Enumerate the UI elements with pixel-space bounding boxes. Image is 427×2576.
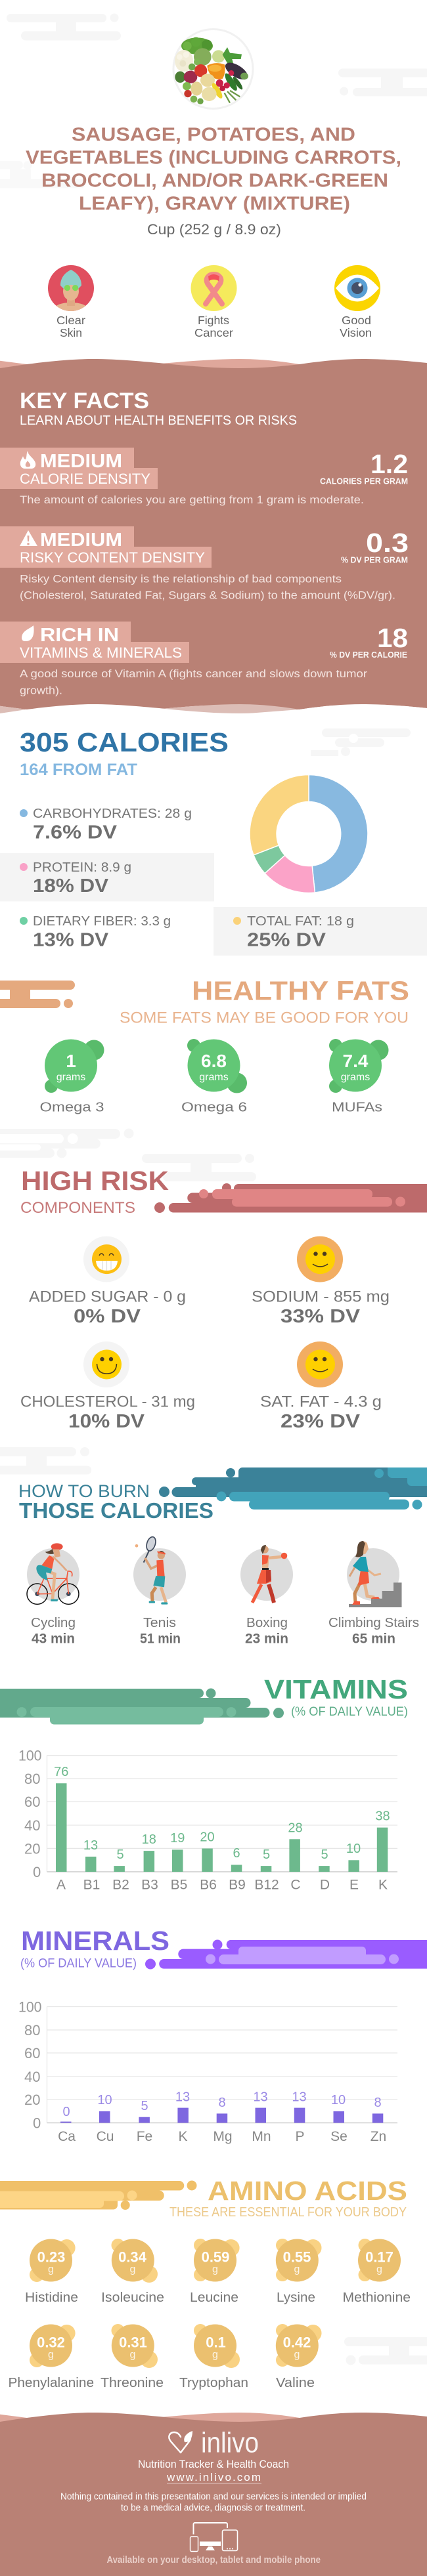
title: BROCCOLI, AND/OR DARK-GREEN: [41, 171, 388, 192]
macro: protein: [0, 853, 214, 902]
bar chart: minerals: 10: [331, 2093, 346, 2107]
amino: histidine: Histidine: [25, 2291, 78, 2305]
donut chart: calories by macro: [250, 774, 368, 893]
bar chart: vitamins: B12: [254, 1878, 279, 1893]
bar chart: minerals: 10: [97, 2093, 112, 2107]
heading: calories: 305 CALORIES: [20, 727, 229, 757]
fact: calorie density: CALORIES PER GRAM: [320, 476, 408, 486]
amino: threonine: g: [130, 2350, 135, 2361]
bar chart: minerals: 5: [141, 2099, 148, 2113]
bar chart: minerals: 8: [374, 2096, 382, 2110]
icon: flame: [20, 451, 35, 469]
macro: total fat: [214, 907, 427, 956]
background cloud: above burn section: [0, 1447, 91, 1474]
risk: saturated fat: SAT. FAT - 4.3 g: [260, 1393, 382, 1411]
title: SAUSAGE, POTATOES, AND: [72, 125, 355, 146]
heading: vitamins: VITAMINS: [264, 1674, 408, 1704]
bar chart: minerals: Mn: [252, 2129, 271, 2144]
bar chart: vitamins: 10: [346, 1842, 361, 1856]
macro: carbohydrates: [20, 807, 192, 843]
background cloud: behind title: [0, 161, 85, 188]
decoration: high risk banner: [154, 1183, 427, 1213]
bar chart: minerals: 8: [218, 2096, 226, 2110]
amino: valine: Valine: [276, 2376, 315, 2390]
bar chart: vitamins: 80: [24, 1771, 40, 1787]
fact: risky content density: 0.3: [366, 528, 409, 558]
tagline: Nutrition Tracker & Health Coach: [138, 2458, 289, 2470]
exercise: climbing stairs: Climbing Stairs: [328, 1616, 419, 1630]
amino: lysine: Lysine: [277, 2291, 315, 2305]
exercise: climbing stairs: [328, 1541, 419, 1646]
amino: histidine: [25, 2239, 78, 2305]
amino: valine: g: [294, 2350, 300, 2361]
risk: sodium: SODIUM - 855 mg: [252, 1288, 390, 1306]
bar chart: minerals: Ca: [58, 2129, 76, 2144]
macro: protein: 18% DV: [33, 876, 109, 897]
macro: total fat: 25% DV: [247, 929, 326, 950]
bar chart: vitamins: B6: [200, 1878, 217, 1893]
risk: saturated fat: [260, 1341, 382, 1432]
bar chart: minerals: Fe: [137, 2129, 152, 2144]
bar chart: vitamins: B1: [83, 1878, 100, 1893]
title: LEAFY), GRAVY (MIXTURE): [79, 193, 350, 214]
bar chart: minerals: 40: [24, 2069, 40, 2085]
wave: bottom of key facts: [0, 702, 427, 710]
fact: rich in vitamins and minerals: A good source of Vitamin A (fights cancer and slows down tumor: [20, 667, 367, 680]
amino: methionine: Methionine: [343, 2291, 411, 2305]
fact: rich in vitamins and minerals: VITAMINS & MINERALS: [20, 644, 182, 661]
amino: tryptophan: Tryptophan: [179, 2376, 248, 2390]
fact: risky content density: (Cholesterol, Saturated Fat, Sugars & Sodium) to the amount (%DV/gr).: [20, 589, 395, 601]
macro: carbohydrates: CARBOHYDRATES: 28 g: [33, 807, 192, 821]
macro: carbohydrates: 7.6% DV: [33, 822, 118, 843]
bar chart: vitamins: 38: [375, 1809, 390, 1823]
bar chart: minerals: P: [295, 2129, 305, 2144]
heading: those calories: THOSE CALORIES: [19, 1498, 214, 1523]
fact: rich in vitamins and minerals: [0, 622, 408, 697]
amino: leucine: 0.59: [202, 2249, 229, 2266]
macro: dietary fiber: DIETARY FIBER: 3.3 g: [33, 914, 171, 929]
fact: rich in vitamins and minerals: RICH IN: [40, 625, 119, 646]
amino: isoleucine: Isoleucine: [101, 2291, 164, 2305]
amino: isoleucine: g: [130, 2264, 135, 2275]
exercise: tennis: Tenis: [143, 1616, 176, 1630]
bar chart: vitamins: E: [349, 1878, 359, 1893]
fat: omega 6: [181, 1039, 247, 1114]
fact: rich in vitamins and minerals: 18: [377, 623, 408, 653]
amino: methionine: [343, 2239, 411, 2305]
background cloud: top right: [338, 68, 427, 96]
bar chart: minerals: 20: [24, 2092, 40, 2108]
panel: key facts: [0, 359, 427, 719]
disclaimer: [60, 2491, 367, 2514]
amino: lysine: g: [294, 2264, 300, 2275]
macro: dietary fiber: [20, 914, 171, 950]
fat: omega 3: [39, 1040, 104, 1114]
disclaimer: to be a medical advice, diagnosis or treatment.: [121, 2502, 305, 2514]
background cloud: behind high risk: [142, 1154, 256, 1181]
amino: histidine: g: [48, 2264, 54, 2275]
heading: high risk: HIGH RISK: [21, 1166, 169, 1196]
fat: MUFAs: grams: [341, 1072, 370, 1083]
bar chart: vitamins: D: [320, 1878, 330, 1893]
amino: phenylalanine: 0.32: [37, 2334, 65, 2351]
background cloud: upper left of high risk: [0, 1129, 134, 1158]
decoration: amino acids banner: [0, 2180, 197, 2210]
fact: calorie density: The amount of calories you are getting from 1 gram is moderate.: [20, 494, 364, 506]
amino: lysine: [276, 2239, 322, 2305]
food photo: vegetables in ring: [173, 29, 253, 109]
fact: risky content density: [0, 526, 409, 601]
bar chart: vitamins: 20: [24, 1840, 40, 1857]
bar chart: vitamins: B2: [112, 1878, 129, 1893]
bar chart: minerals: Se: [330, 2129, 348, 2144]
bar chart: vitamins: 20: [200, 1830, 215, 1844]
disclaimer: Nothing contained in this presentation and our services is intended or implied: [60, 2491, 367, 2502]
bar chart: minerals: 13: [292, 2090, 307, 2104]
bar chart: vitamins: C: [290, 1878, 301, 1893]
fat: MUFAs: MUFAs: [332, 1100, 382, 1114]
fat: omega 6: 6.8: [201, 1051, 227, 1071]
decoration: healthy fats banner: [0, 981, 75, 1008]
bar chart: minerals: 80: [24, 2022, 40, 2038]
bar chart: vitamins: 100: [18, 1747, 42, 1764]
amino: phenylalanine: g: [48, 2350, 54, 2361]
exercise: boxing: [240, 1545, 293, 1646]
background cloud: top left: [7, 13, 121, 41]
risk: cholesterol: 10% DV: [68, 1411, 145, 1432]
amino: histidine: 0.23: [37, 2249, 65, 2266]
benefit: good vision: Good: [342, 314, 371, 327]
heading: minerals: MINERALS: [21, 1926, 169, 1956]
website link: www.inlivo.com: [166, 2471, 261, 2483]
benefit: clear skin: Skin: [60, 326, 82, 339]
exercise: climbing stairs: 65 min: [352, 1632, 395, 1646]
exercise: boxing: Boxing: [246, 1616, 288, 1630]
bar chart: minerals: 100: [18, 1999, 42, 2015]
bar chart: vitamins: A: [56, 1878, 66, 1893]
logo: inlivo heart: [169, 2431, 192, 2453]
subheading: vitamins: (% OF DAILY VALUE): [291, 1705, 408, 1719]
amino: leucine: Leucine: [190, 2291, 238, 2305]
bar chart: vitamins: 6: [233, 1846, 240, 1861]
risk: added sugar: 0% DV: [74, 1306, 141, 1327]
fat: omega 3: 1: [66, 1051, 76, 1071]
subheading: minerals: (% OF DAILY VALUE): [20, 1957, 137, 1970]
fat: omega 6: grams: [199, 1072, 229, 1083]
amino: isoleucine: 0.34: [118, 2249, 147, 2266]
amino: methionine: 0.17: [365, 2249, 393, 2266]
benefit: good vision: [334, 265, 380, 339]
benefit: fights cancer: Cancer: [194, 326, 233, 339]
bar chart: minerals: 0: [62, 2105, 70, 2119]
bar chart: vitamins: 5: [116, 1848, 124, 1862]
subheading: key facts: LEARN ABOUT HEALTH BENEFITS OR RISKS: [20, 413, 297, 428]
decoration: minerals banner: [145, 1940, 427, 1969]
fact: calorie density: [0, 448, 408, 506]
bar chart: minerals: K: [178, 2129, 188, 2144]
risk: cholesterol: CHOLESTEROL - 31 mg: [20, 1393, 195, 1411]
bar chart: minerals: 13: [253, 2090, 268, 2104]
risk: sodium: [252, 1236, 390, 1327]
macro: protein: PROTEIN: 8.9 g: [33, 860, 131, 875]
heading: how to burn: HOW TO BURN: [18, 1481, 150, 1501]
exercise: cycling: Cycling: [31, 1616, 76, 1630]
fact: calorie density: 1.2: [371, 449, 408, 479]
exercise: cycling: [27, 1543, 79, 1646]
heading: amino acids: AMINO ACIDS: [208, 2176, 407, 2206]
availability note: Available on your desktop, tablet and mobile phone: [106, 2555, 321, 2565]
risk: saturated fat: 23% DV: [281, 1411, 361, 1432]
amino: threonine: 0.31: [119, 2334, 147, 2351]
bar chart: minerals: Cu: [97, 2129, 114, 2144]
amino: tryptophan: 0.1: [206, 2334, 226, 2351]
risk: cholesterol: [20, 1341, 195, 1432]
fat: MUFAs: [329, 1039, 389, 1114]
wave: top of key facts: [0, 359, 300, 377]
panel: footer: [0, 2413, 427, 2576]
bar chart: minerals: Zn: [371, 2129, 386, 2144]
fact: risky content density: MEDIUM: [40, 530, 122, 551]
amino: leucine: g: [212, 2264, 218, 2275]
exercise: tennis: [133, 1536, 186, 1646]
bar chart: minerals: 0: [33, 2115, 41, 2132]
benefit: clear skin: Clear: [56, 314, 85, 327]
bar chart: vitamins: 76: [54, 1765, 68, 1779]
decoration: burn calories banner: [159, 1467, 427, 1510]
bar chart: vitamins: B5: [171, 1878, 187, 1893]
bar chart: vitamins: B9: [229, 1878, 246, 1893]
subheading: from fat: 164 FROM FAT: [20, 761, 137, 779]
title: [26, 125, 401, 214]
risk: added sugar: [29, 1236, 186, 1327]
amino: phenylalanine: Phenylalanine: [8, 2376, 94, 2390]
exercise: tennis: 51 min: [140, 1632, 181, 1646]
bar chart: vitamins: [18, 1747, 397, 1893]
wave: top of footer: [0, 2413, 300, 2428]
fat: omega 3: grams: [56, 1072, 85, 1083]
bar chart: vitamins: 5: [321, 1848, 328, 1862]
bar chart: vitamins: 40: [24, 1817, 40, 1834]
bar chart: minerals: 60: [24, 2045, 40, 2061]
exercise: cycling: 43 min: [32, 1632, 75, 1646]
bar chart: vitamins: B3: [141, 1878, 158, 1893]
fat: MUFAs: 7.4: [343, 1051, 369, 1071]
amino: threonine: Threonine: [101, 2376, 164, 2390]
amino: phenylalanine: [8, 2325, 94, 2390]
fat: omega 6: Omega 6: [181, 1100, 247, 1114]
amino: leucine: [190, 2239, 240, 2305]
serving size: Cup (252 g / 8.9 oz): [147, 221, 281, 238]
heading: key facts: KEY FACTS: [20, 389, 149, 413]
risk: sodium: 33% DV: [281, 1306, 361, 1327]
fact: risky content density: Risky Content density is the relationship of bad components: [20, 572, 342, 585]
amino: tryptophan: [179, 2324, 248, 2390]
bar chart: vitamins: 60: [24, 1794, 40, 1810]
amino: isoleucine: [101, 2239, 164, 2305]
bar chart: minerals: 13: [175, 2090, 190, 2104]
benefit: good vision: Vision: [340, 326, 372, 339]
icon: warning triangle: [20, 530, 37, 546]
macro: total fat: TOTAL FAT: 18 g: [247, 914, 354, 929]
fat: omega 3: Omega 3: [39, 1100, 104, 1114]
bar chart: vitamins: 13: [83, 1838, 98, 1853]
risk: added sugar: ADDED SUGAR - 0 g: [29, 1288, 186, 1306]
bar chart: minerals: Mg: [213, 2129, 233, 2144]
amino: methionine: g: [376, 2264, 382, 2275]
bar chart: vitamins: 19: [170, 1831, 185, 1846]
amino: valine: 0.42: [283, 2334, 311, 2351]
amino: threonine: [101, 2324, 164, 2390]
benefit: fights cancer: [191, 265, 236, 339]
amino: tryptophan: g: [212, 2350, 218, 2361]
background cloud: calories: [311, 728, 411, 756]
bar chart: vitamins: K: [378, 1878, 388, 1893]
bar chart: vitamins: 5: [263, 1848, 270, 1862]
fact: calorie density: CALORIE DENSITY: [20, 471, 150, 487]
logo: inlivo wordmark: inlivo: [201, 2427, 259, 2459]
benefit: clear skin: [48, 265, 94, 339]
icon: desktop, tablet and phone: [191, 2523, 238, 2552]
title: VEGETABLES (INCLUDING CARROTS,: [26, 147, 401, 168]
amino: valine: [276, 2324, 322, 2390]
bar chart: minerals: [18, 1999, 397, 2144]
fact: rich in vitamins and minerals: % DV PER CALORIE: [330, 650, 407, 660]
icon: leaf: [22, 625, 34, 641]
bar chart: vitamins: 0: [33, 1864, 41, 1880]
fact: calorie density: MEDIUM: [40, 451, 122, 472]
decoration: vitamins banner: [0, 1688, 284, 1725]
fact: risky content density: % DV PER GRAM: [341, 555, 408, 564]
amino: lysine: 0.55: [283, 2249, 311, 2266]
benefit: fights cancer: Fights: [198, 314, 229, 327]
exercise: boxing: 23 min: [245, 1632, 288, 1646]
subheading: components: COMPONENTS: [20, 1199, 135, 1217]
bar chart: vitamins: 18: [142, 1832, 156, 1847]
background cloud: lower right: [344, 2337, 427, 2365]
macro: dietary fiber: 13% DV: [33, 929, 109, 950]
heading: healthy fats: HEALTHY FATS: [192, 975, 409, 1005]
fact: rich in vitamins and minerals: growth).: [20, 684, 62, 697]
subheading: healthy fats: SOME FATS MAY BE GOOD FOR YOU: [120, 1009, 409, 1026]
bar chart: vitamins: 28: [288, 1821, 303, 1835]
fact: risky content density: RISKY CONTENT DENSITY: [20, 549, 205, 566]
